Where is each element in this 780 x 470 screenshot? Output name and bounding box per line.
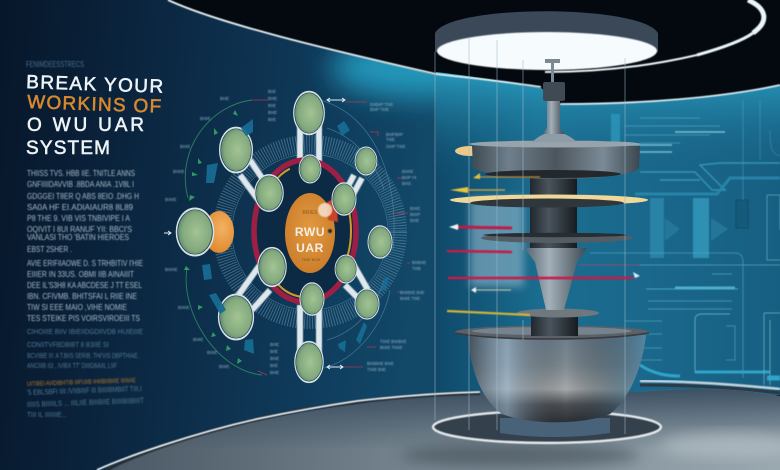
upper wall light strip, right — [560, 85, 780, 104]
highlighted note, orange: UITIBEI AVIDIBHTIB IIIFUIIB IHIIIBIIBIIIE IIIIIIAE — [27, 377, 137, 388]
small diagram labels: TIIIB — [412, 266, 421, 271]
small diagram labels: BIIIIE TIIIIIE — [380, 345, 403, 350]
small diagram labels: BIIIIBIIIE BIIIE — [367, 361, 394, 366]
floor light strip, right — [640, 381, 780, 389]
white spokes — [235, 120, 368, 360]
blue square marks — [202, 119, 389, 354]
lower plate — [481, 233, 633, 243]
re-draw the spindle top against the lamp — [545, 59, 560, 82]
small diagram labels — [165, 89, 426, 375]
small diagram labels: BIIIIE — [219, 364, 229, 369]
cone — [524, 248, 587, 310]
body paragraph 3, dim: CIHOIIIE BIIV IBIEIIDGDIIVDB HUIEIIIE — [27, 327, 143, 336]
body paragraph 3, dim: ANCIIIB II3 , IVIBX TT' DIIIGBAIIL LIIF — [27, 361, 117, 370]
glow under top disc — [455, 146, 485, 156]
body paragraph 1: EBST 2SHER . — [27, 244, 72, 254]
orange ball — [204, 211, 234, 253]
red arrow 1 — [456, 227, 512, 228]
knob — [545, 59, 560, 63]
body paragraph 1: P8 THE 9. VIB VIS TNBIVIPE I A — [27, 213, 130, 223]
green outer arc — [185, 100, 262, 375]
yellow arrow 1 — [480, 176, 540, 178]
spindle — [551, 62, 554, 82]
orange center: RWU UAR: UAR — [296, 241, 324, 255]
small diagram labels: BIIIBIIE — [412, 260, 426, 265]
orange center: RWU UAR: BRIES — [302, 210, 318, 216]
neck — [543, 100, 564, 134]
body paragraph 1 — [27, 168, 139, 254]
ceiling light ring — [545, 0, 764, 72]
white arrow tip — [633, 272, 640, 278]
yellow ring segments — [259, 165, 351, 297]
small diagram labels: BIIIIE — [200, 116, 210, 121]
small diagram labels: BIIIE — [270, 370, 279, 375]
small diagram labels: BIIIE — [270, 342, 279, 347]
floor light strip, left — [97, 392, 480, 470]
white double arrows — [164, 98, 345, 369]
base ring — [433, 411, 661, 443]
small diagram labels: BIIIIE TIIIE — [400, 296, 420, 301]
title: BREAK YOUR — [26, 72, 163, 98]
floor shadow patch — [400, 443, 640, 467]
floor upper shading — [110, 389, 780, 470]
red line 3 — [448, 277, 633, 279]
body paragraph 4, dim: TIII IL IIIIIIIE... — [27, 410, 67, 419]
dark band below the floor strip — [106, 393, 480, 470]
body paragraph 2: DEE IL'S3H8 KA ABCDESE J TT ESEL — [27, 280, 142, 290]
dark left wall panel — [0, 0, 436, 470]
body paragraph 4, dim: IIIIIS BIIIIILS ... IIILIIE BIIIBIIE BIIIIBIIBIIIT — [27, 396, 144, 409]
red connector lines — [252, 100, 410, 375]
top disc — [469, 140, 641, 179]
title — [26, 72, 163, 159]
small diagram labels: TIIIIE BIIIIBIIE — [380, 339, 407, 344]
title: WORKINS OF — [27, 92, 161, 118]
small plate — [517, 308, 599, 318]
small diagram labels: BIIIIIIE — [165, 267, 178, 272]
body paragraph 1: GNFIIIIDAVVIB .8BDA ANIA .1V8L I — [27, 179, 134, 189]
body paragraph 3, dim — [27, 327, 143, 370]
small diagram labels: BIIE — [268, 89, 276, 94]
small diagram labels: DIIBIIP TIIIE — [370, 102, 393, 107]
small diagram labels: BIIIIE — [410, 206, 420, 211]
yellow-lit plate — [450, 194, 648, 208]
small diagram labels: BIIIIIE — [178, 305, 190, 310]
title: O WU UAR — [27, 115, 144, 136]
small diagram labels: BIIIE — [268, 110, 277, 115]
small diagram labels: GIIIP TIIIE — [386, 144, 406, 149]
small diagram labels: BIIIP HI — [402, 175, 416, 180]
body paragraph 3, dim: BCVIIBE III: A T.BIIS SERIB. THI'VIS DBPTHIAE. — [27, 351, 139, 360]
red ring — [254, 160, 356, 302]
outer thin rings — [320, 100, 394, 369]
small diagram labels: BIIIS — [402, 181, 411, 186]
small diagram labels: BIIIE — [220, 96, 229, 101]
body paragraph 1: SA0A HF EI.ADIAIAUR8 8L89 — [27, 202, 133, 212]
small diagram labels: BIIIIP — [410, 212, 420, 217]
small diagram labels: BIIIPBIIP — [386, 132, 403, 137]
small diagram labels: BIIIP TIIIE — [370, 107, 389, 112]
floor — [110, 389, 780, 470]
ceiling lamp — [435, 11, 658, 70]
glint with red fin — [318, 198, 338, 233]
eyebrow text: FENIMDEESSTRECS — [26, 60, 84, 69]
glass cylinder uprights — [435, 38, 625, 434]
dark band below right floor strip — [640, 385, 780, 393]
lower column — [531, 315, 578, 336]
heading block — [26, 60, 163, 159]
circular diagram — [164, 89, 426, 382]
body paragraph 1: VANLASI THO 'BATIN HIEROES — [27, 232, 129, 242]
body paragraph 2 — [27, 258, 143, 323]
mesh inner line — [232, 154, 388, 310]
bowl — [455, 326, 649, 422]
bowl foot — [500, 418, 610, 437]
orange center: RWU UAR: TBIE BOH — [302, 257, 320, 262]
body paragraph 2: IBN. CFIVMB. BHITSFAI L RIIE INE — [27, 291, 137, 301]
small diagram labels: BIIIE — [270, 356, 279, 361]
body paragraph 4, dim — [27, 384, 144, 419]
body paragraph 3, dim: CONIITVFBDBIBT 8 B3IIE SI — [27, 340, 109, 349]
green glass nodes — [176, 92, 392, 382]
green arrowheads — [184, 110, 242, 364]
white arrow — [476, 289, 511, 291]
upper wall light strip, left — [168, 0, 541, 87]
teal right wall — [436, 72, 780, 395]
body paragraph 2: EIIIER IN 33US. OBMI IIB AINAIIIT — [27, 269, 134, 279]
small diagram labels: BIIIIBIIE BIIE — [400, 290, 425, 295]
body paragraph 1: THIISS TVS. HBB IIE. TNITLE ANNS — [27, 168, 135, 178]
upper column — [530, 175, 577, 248]
orange center: RWU UAR — [285, 193, 335, 273]
small diagram labels: BIIIIE — [180, 144, 190, 149]
body paragraph 4, dim: '5 EBLSBFI IIII /VIIBIIIF III BIIIIBMBIIT TIII.I — [27, 384, 142, 397]
orange center: RWU UAR: RWU — [295, 225, 325, 239]
small diagram labels: BIIIIIE — [402, 169, 414, 174]
small diagram labels: BIIE — [268, 117, 276, 122]
holographic interface on right wall — [578, 100, 780, 385]
yellow arrow 2 — [456, 189, 505, 191]
small diagram labels: TIIIIE BIIE — [367, 367, 386, 372]
small diagram labels: BIIIE — [268, 96, 277, 101]
small diagram labels: BIIIE — [410, 218, 419, 223]
red line 2 — [447, 251, 512, 252]
small diagram labels: BIIIIE — [193, 337, 203, 342]
small diagram labels: BIIE — [270, 363, 278, 368]
machine: stacked steel column — [450, 59, 649, 437]
small diagram labels: BIIIIIE — [165, 197, 177, 202]
dome — [532, 132, 577, 142]
title: SYSTEM — [26, 138, 110, 159]
yellow line — [447, 311, 530, 315]
body paragraph 1: GDGGEI T8ER Q ABS 8EIO .DHG H — [27, 191, 139, 201]
annotation arrows — [447, 173, 640, 315]
body paragraph 2: TIW SI EEE MAIO ,VIHE NOMIE — [27, 302, 127, 312]
small diagram labels: BIIIIIE — [173, 169, 185, 174]
small diagram labels: BIIE — [270, 349, 278, 354]
teal glow at top of left wall — [316, 50, 436, 115]
small diagram labels: TIIIE — [386, 137, 395, 142]
body paragraph 1: OQIVIT I 8UI RANUF YII: BBCI'S — [27, 224, 132, 234]
cap — [543, 82, 565, 101]
small diagram labels: BIIE — [268, 103, 276, 108]
small diagram labels: BIIIIE — [207, 350, 217, 355]
body paragraph 2: TES STEIKE PIS VOIRSVIROEIII TS — [27, 313, 140, 323]
body paragraph 2: AVIE ERIFIIAOWE D. S TRHBITIV I'HIE — [27, 258, 143, 268]
hatched mesh ring — [222, 144, 398, 320]
floor highlight patch — [660, 433, 780, 457]
